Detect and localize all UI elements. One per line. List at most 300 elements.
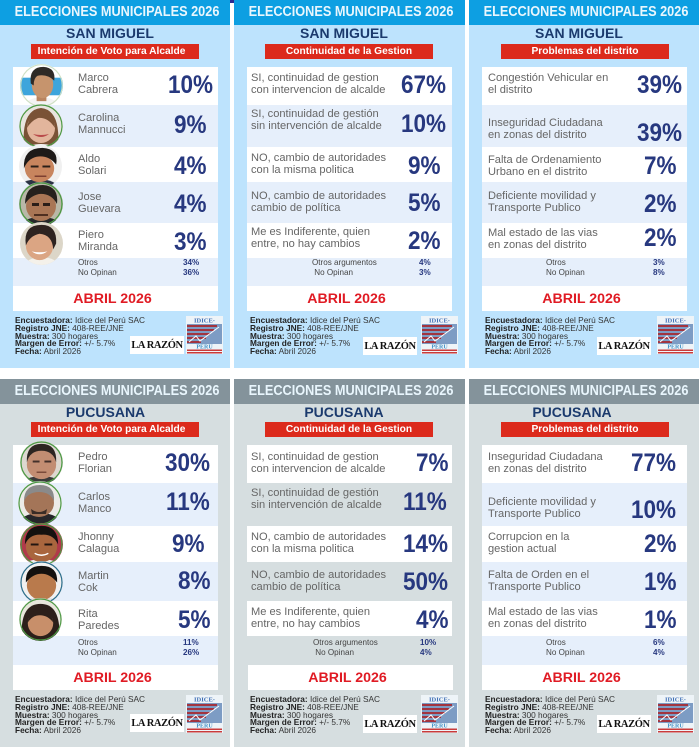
survey details: Fecha: Abril 2026: [485, 725, 551, 735]
panel: Pucusana continuity of management: [234, 379, 465, 747]
photo: Pedro Florian: [20, 441, 63, 483]
survey details: Encuestadora: Idice del Perú SAC: [485, 694, 615, 704]
survey details: [485, 696, 620, 735]
name: Guevara: [78, 203, 121, 215]
name: Pedro: [78, 451, 108, 463]
values: [420, 638, 436, 658]
option text: con la misma politica: [251, 543, 354, 555]
percentage: 8%: [178, 567, 211, 595]
option text: [488, 227, 598, 251]
survey details: [250, 315, 380, 356]
heading: [0, 0, 230, 25]
district name: SAN MIGUEL: [300, 25, 388, 41]
option text: Deficiente movilidad y: [488, 496, 596, 508]
row 4: [482, 562, 687, 601]
row 4: [247, 562, 452, 601]
name: Cabrera: [78, 84, 118, 96]
red section label: [501, 44, 669, 59]
option text: [488, 531, 569, 555]
row 2: [247, 105, 452, 147]
survey details: [250, 696, 385, 735]
labels: No Opinan: [78, 268, 117, 277]
row: Martin Cok: [13, 562, 218, 601]
date band: [13, 286, 218, 311]
name: Marco: [78, 72, 109, 84]
row 4: [247, 182, 452, 223]
percentage: 3%: [174, 228, 207, 256]
values: 36%: [183, 268, 199, 277]
name: Carolina: [78, 112, 119, 124]
option text: NO, cambio de autoridades: [251, 190, 386, 202]
option text: [488, 606, 598, 630]
logo: La Razón: [597, 715, 651, 733]
name: [78, 531, 120, 555]
survey details: Muestra: 300 hogares: [485, 330, 568, 340]
values: [653, 258, 665, 277]
photo: Martin Cok: [20, 561, 63, 602]
option text: [251, 152, 386, 176]
logo: La Razón: LA RAZÓN: [364, 341, 416, 352]
option text: Me es Indiferente, quien: [251, 606, 370, 618]
survey details: Fecha: Abril 2026: [15, 346, 81, 356]
percentage: 11%: [166, 488, 210, 516]
logo: Idice Perú: PERU: [431, 344, 448, 350]
row 2: [482, 483, 687, 526]
logo: La Razón: [363, 715, 417, 733]
values: 10%: [420, 638, 436, 647]
percentage: 11%: [403, 488, 447, 516]
values: [419, 258, 431, 277]
survey details: Margen de Error: +/- 5.7%: [15, 717, 115, 727]
option text: Transporte Publico: [488, 581, 581, 593]
others and no opinion: [13, 636, 218, 665]
date: ABRIL 2026: [542, 291, 621, 307]
values: 3%: [653, 258, 665, 267]
values: 6%: [653, 638, 665, 647]
heading: ELECCIONES MUNICIPALES 2026: [248, 4, 453, 20]
row: Jose Guevara: [13, 182, 218, 223]
row 3: [247, 526, 452, 562]
percentage: 39%: [637, 119, 682, 147]
logo: Idice Perú: IDICE-: [429, 696, 450, 704]
others and no opinion: [247, 636, 452, 665]
survey details: Registro JNE: 408-REE/JNE: [15, 702, 124, 712]
percentage: 9%: [174, 111, 207, 139]
option text: NO, cambio de autoridades: [251, 531, 386, 543]
name: [78, 491, 111, 515]
survey details: Registro JNE: 408-REE/JNE: [250, 323, 359, 333]
name: Paredes: [78, 620, 119, 632]
row 3: [247, 147, 452, 182]
date band: [482, 286, 687, 311]
heading: [469, 0, 699, 25]
option text: Transporte Publico: [488, 508, 581, 520]
red section label: Intención de Voto para Alcalde: [38, 46, 185, 57]
values: 26%: [183, 648, 199, 657]
row 2: [247, 483, 452, 526]
district name: SAN MIGUEL: [66, 25, 154, 41]
date band: [482, 665, 687, 690]
row 5: [247, 601, 452, 636]
option text: sin intervención de alcalde: [251, 499, 382, 511]
red section label: [31, 422, 199, 437]
option text: [251, 569, 386, 593]
name: Jhonny: [78, 531, 114, 543]
labels: No Opinan: [546, 648, 585, 657]
values: 3%: [419, 268, 431, 277]
values: [183, 638, 199, 658]
survey details: Registro JNE: 408-REE/JNE: [250, 702, 359, 712]
row 1: [482, 67, 687, 105]
name: Mannucci: [78, 124, 125, 136]
name: Cok: [78, 582, 98, 594]
heading: [0, 379, 230, 404]
logo: Idice Perú: IDICE-: [665, 696, 686, 704]
option text: SI, continuidad de gestion: [251, 451, 379, 463]
survey details: Muestra: 300 hogares: [485, 710, 568, 720]
logo: La Razón: [597, 337, 651, 355]
photo: Jhonny Calagua: [20, 523, 63, 564]
panel: Pucusana district problems: [469, 379, 699, 747]
others and no opinion: [247, 258, 452, 286]
percentage: 10%: [401, 110, 446, 138]
percentage: 1%: [644, 568, 677, 596]
labels: Otros: [546, 638, 566, 647]
photo: Jose Guevara: [19, 182, 63, 224]
option text: Deficiente movilidad y: [488, 190, 596, 202]
labels: [313, 638, 378, 658]
percentage: 4%: [416, 606, 449, 634]
values: 4%: [419, 258, 431, 267]
name: Piero: [78, 229, 104, 241]
labels: Otros argumentos: [313, 638, 378, 647]
survey details: Encuestadora: Idice del Perú SAC: [250, 315, 380, 325]
name: Florian: [78, 463, 112, 475]
heading: ELECCIONES MUNICIPALES 2026: [483, 4, 688, 20]
logo: La Razón: LA RAZÓN: [131, 718, 183, 729]
survey details: Margen de Error: +/- 5.7%: [485, 338, 585, 348]
survey details: Fecha: Abril 2026: [250, 725, 316, 735]
option text: Falta de Orden en el: [488, 569, 589, 581]
option text: [488, 154, 601, 178]
option text: gestion actual: [488, 543, 556, 555]
option text: en zonas del distrito: [488, 239, 587, 251]
row 1: [247, 67, 452, 105]
photo: Aldo Solari: [19, 146, 62, 185]
option text: NO, cambio de autoridades: [251, 569, 386, 581]
survey details: Registro JNE: 408-REE/JNE: [15, 323, 124, 333]
name: Martin: [78, 570, 109, 582]
corner mark: [230, 0, 235, 3]
photo: Rita Paredes: [19, 598, 62, 641]
option text: Inseguridad Ciudadana: [488, 451, 603, 463]
option text: con intervencion de alcalde: [251, 84, 385, 96]
labels: [546, 258, 585, 277]
option text: cambio de política: [251, 202, 340, 214]
survey details: Muestra: 300 hogares: [250, 330, 333, 340]
percentage: 2%: [408, 227, 441, 255]
percentage: 39%: [637, 71, 682, 99]
row 3: [482, 147, 687, 182]
logo: Idice Perú: IDICE-: [194, 696, 215, 704]
labels: Otros: [78, 258, 98, 267]
logo: La Razón: LA RAZÓN: [598, 341, 650, 352]
option text: cambio de política: [251, 581, 340, 593]
district name: PUCUSANA: [66, 404, 145, 420]
panel: San Miguel district problems: [469, 0, 699, 368]
option text: con intervencion de alcalde: [251, 463, 385, 475]
heading: [234, 379, 465, 404]
survey details: [15, 696, 150, 735]
survey details: [15, 315, 145, 356]
labels: [78, 258, 117, 277]
option text: Mal estado de las vias: [488, 606, 598, 618]
photo: Piero Miranda: [20, 222, 63, 265]
name: Solari: [78, 165, 106, 177]
red section label: Continuidad de la Gestion: [286, 46, 412, 57]
row 5: [482, 223, 687, 258]
percentage: 77%: [631, 449, 676, 477]
row: Carlos Manco: [13, 483, 218, 526]
option text: en zonas del distrito: [488, 463, 587, 475]
row 5: [247, 223, 452, 258]
percentage: 4%: [174, 190, 207, 218]
photo: Marco Cabrera: [20, 64, 63, 106]
name: [78, 570, 109, 594]
red section label: Problemas del distrito: [532, 46, 638, 57]
percentage: 50%: [403, 568, 448, 596]
others and no opinion: [482, 258, 687, 286]
values: 4%: [420, 648, 432, 657]
percentage: 1%: [644, 606, 677, 634]
name: Carlos: [78, 491, 110, 503]
option text: Falta de Ordenamiento: [488, 154, 601, 166]
date band: [247, 286, 452, 311]
survey details: Muestra: 300 hogares: [15, 330, 98, 340]
red section label: [265, 422, 433, 437]
survey details: Fecha: Abril 2026: [15, 725, 81, 735]
logo: Idice Perú: [186, 695, 223, 733]
option text: Me es Indiferente, quien: [251, 226, 370, 238]
logo: La Razón: LA RAZÓN: [131, 340, 183, 351]
survey details: Margen de Error: +/- 5.7%: [250, 338, 350, 348]
row 3: [482, 526, 687, 562]
percentage: 7%: [416, 449, 449, 477]
values: 4%: [653, 648, 665, 657]
option text: [488, 190, 596, 214]
heading: ELECCIONES MUNICIPALES 2026: [14, 383, 219, 399]
name: Rita: [78, 608, 98, 620]
values: 8%: [653, 268, 665, 277]
name: Miranda: [78, 241, 118, 253]
row 1: [247, 445, 452, 483]
survey details: Encuestadora: Idice del Perú SAC: [485, 315, 615, 325]
labels: No Opinan: [315, 648, 354, 657]
option text: Corrupcion en la: [488, 531, 569, 543]
percentage: 2%: [644, 190, 677, 218]
percentage: 30%: [165, 449, 210, 477]
labels: No Opinan: [78, 648, 117, 657]
row: Rita Paredes: [13, 601, 218, 636]
row 4: [482, 182, 687, 223]
option text: [251, 72, 385, 96]
labels: Otros: [546, 258, 566, 267]
logo: Idice Perú: [421, 316, 458, 354]
logo: Idice Perú: [186, 316, 223, 354]
photo: Carlos Manco: [18, 481, 62, 524]
red section label: [31, 44, 199, 59]
percentage: 10%: [631, 496, 676, 524]
logo: La Razón: [363, 337, 417, 355]
row: Carolina Mannucci: [13, 105, 218, 147]
survey details: Encuestadora: Idice del Perú SAC: [250, 694, 380, 704]
survey details: [485, 315, 615, 356]
logo: La Razón: LA RAZÓN: [364, 719, 416, 730]
labels: [546, 638, 585, 658]
option text: [488, 451, 603, 475]
option text: [488, 496, 596, 520]
date: ABRIL 2026: [73, 670, 152, 686]
district name: SAN MIGUEL: [535, 25, 623, 41]
photo: Carolina Mannucci: [19, 104, 63, 147]
option text: [488, 569, 589, 593]
date band: [13, 665, 218, 690]
heading: [469, 379, 699, 404]
logo: Idice Perú: IDICE-: [194, 318, 215, 324]
option text: el distrito: [488, 84, 532, 96]
option text: en zonas del distrito: [488, 129, 587, 141]
row: Piero Miranda: [13, 223, 218, 258]
row: Pedro Florian: [13, 445, 218, 483]
percentage: 9%: [408, 152, 441, 180]
survey details: Margen de Error: +/- 5.7%: [250, 717, 350, 727]
percentage: 5%: [178, 606, 211, 634]
percentage: 2%: [644, 530, 677, 558]
option text: [488, 117, 603, 141]
name: Manco: [78, 503, 111, 515]
survey details: Muestra: 300 hogares: [15, 710, 98, 720]
percentage: 2%: [644, 224, 677, 252]
name: [78, 191, 121, 215]
survey details: Registro JNE: 408-REE/JNE: [485, 323, 594, 333]
name: [78, 153, 106, 177]
logo: La Razón: [130, 336, 184, 354]
option text: Transporte Publico: [488, 202, 581, 214]
values: 11%: [183, 638, 199, 647]
logo: Idice Perú: IDICE-: [429, 318, 450, 324]
name: [78, 451, 112, 475]
option text: Inseguridad Ciudadana: [488, 117, 603, 129]
red section label: [265, 44, 433, 59]
heading: ELECCIONES MUNICIPALES 2026: [483, 383, 688, 399]
name: Calagua: [78, 543, 119, 555]
date: ABRIL 2026: [308, 670, 387, 686]
logo: Idice Perú: PERU: [196, 724, 213, 730]
percentage: 9%: [172, 530, 205, 558]
values: [183, 258, 199, 277]
district name: PUCUSANA: [532, 404, 612, 420]
logo: Idice Perú: PERU: [667, 344, 684, 350]
panel: San Miguel voting intention: [0, 0, 230, 368]
logo: Idice Perú: [657, 316, 694, 354]
logo: Idice Perú: [421, 695, 458, 733]
option text: [251, 606, 370, 630]
option text: SI, continuidad de gestión: [251, 487, 379, 499]
option text: Urbano en el distrito: [488, 166, 587, 178]
percentage: 4%: [174, 152, 207, 180]
red section label: Continuidad de la Gestion: [286, 424, 412, 435]
option text: entre, no hay cambios: [251, 238, 360, 250]
logo: Idice Perú: PERU: [431, 724, 448, 730]
red section label: Problemas del distrito: [532, 424, 638, 435]
logo: Idice Perú: [657, 695, 694, 733]
percentage: 67%: [401, 71, 446, 99]
survey details: Encuestadora: Idice del Perú SAC: [15, 315, 145, 325]
option text: [251, 487, 382, 511]
district name: PUCUSANA: [304, 404, 384, 420]
panel: Pucusana voting intention: [0, 379, 230, 747]
logo: Idice Perú: PERU: [196, 344, 213, 350]
others and no opinion: [13, 258, 218, 286]
name: [78, 112, 125, 136]
logo: Idice Perú: PERU: [667, 724, 684, 730]
name: [78, 229, 118, 253]
labels: No Opinan: [546, 268, 585, 277]
option text: [251, 190, 386, 214]
row 5: [482, 601, 687, 636]
option text: SI, continuidad de gestion: [251, 72, 379, 84]
red section label: Intención de Voto para Alcalde: [38, 424, 185, 435]
date: ABRIL 2026: [307, 291, 386, 307]
option text: sin intervención de alcalde: [251, 120, 382, 132]
labels: No Opinan: [314, 268, 353, 277]
values: [653, 638, 665, 658]
percentage: 7%: [644, 152, 677, 180]
option text: [488, 72, 608, 96]
heading: ELECCIONES MUNICIPALES 2026: [248, 383, 453, 399]
labels: [78, 638, 117, 658]
percentage: 14%: [403, 530, 448, 558]
date: ABRIL 2026: [73, 291, 152, 307]
labels: Otros argumentos: [312, 258, 377, 267]
option text: [251, 531, 386, 555]
option text: [251, 226, 370, 250]
percentage: 10%: [168, 71, 213, 99]
name: [78, 608, 119, 632]
option text: con la misma politica: [251, 164, 354, 176]
row: Jhonny Calagua: [13, 526, 218, 562]
row: Marco Cabrera: [13, 67, 218, 105]
survey details: Registro JNE: 408-REE/JNE: [485, 702, 594, 712]
red section label: [501, 422, 669, 437]
survey details: Margen de Error: +/- 5.7%: [485, 717, 585, 727]
name: [78, 72, 118, 96]
row 1: [482, 445, 687, 483]
values: 34%: [183, 258, 199, 267]
others and no opinion: [482, 636, 687, 665]
date band: [248, 665, 453, 690]
row: Aldo Solari: [13, 147, 218, 182]
survey details: Margen de Error: +/- 5.7%: [15, 338, 115, 348]
name: Aldo: [78, 153, 100, 165]
heading: [234, 0, 465, 25]
survey details: Fecha: Abril 2026: [485, 346, 551, 356]
percentage: 5%: [408, 189, 441, 217]
labels: Otros: [78, 638, 98, 647]
option text: entre, no hay cambios: [251, 618, 360, 630]
panel: San Miguel continuity of management: [234, 0, 465, 368]
option text: en zonas del distrito: [488, 618, 587, 630]
